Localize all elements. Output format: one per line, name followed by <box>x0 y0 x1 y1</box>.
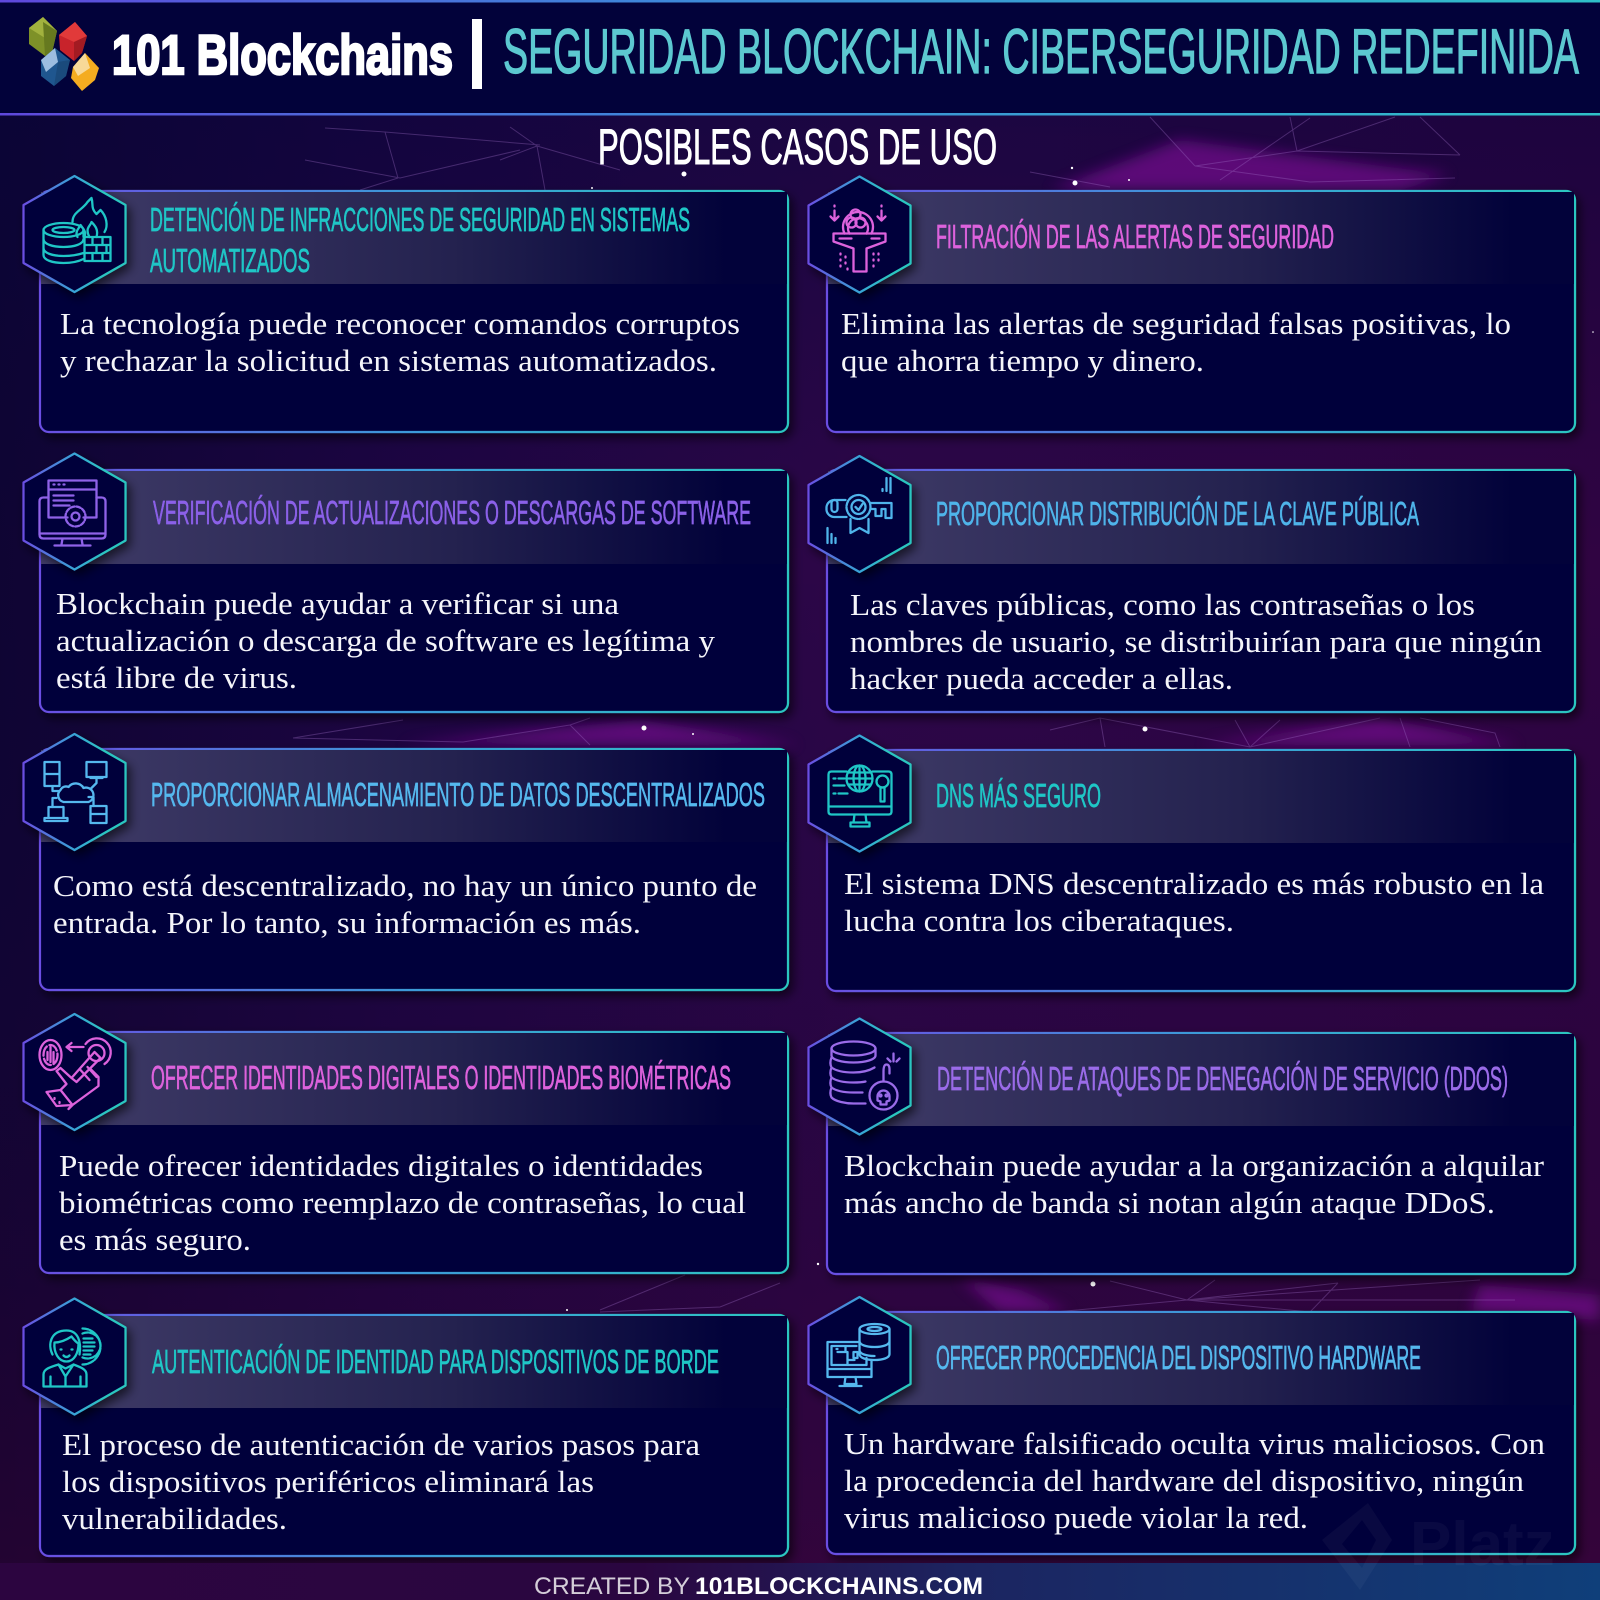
icon: funnel filter <box>808 176 910 292</box>
body text: está libre de virus. <box>56 660 297 695</box>
divider <box>472 19 482 89</box>
footer band <box>0 1563 1600 1600</box>
body text <box>841 306 1511 378</box>
icon: fingerprint and hand <box>24 1014 126 1130</box>
body text: nombres de usuario, se distribuirían para que ningún <box>850 624 1543 659</box>
logo wordmark: 101 Blockchains <box>112 23 453 86</box>
heading: DETENCIÓN DE INFRACCIONES DE SEGURIDAD EN SISTEMAS <box>150 201 690 238</box>
heading: AUTENTICACIÓN DE IDENTIDAD PARA DISPOSITIVOS DE BORDE <box>152 1343 719 1380</box>
body text: virus malicioso puede violar la red. <box>844 1500 1308 1535</box>
panel: verificación de actualizaciones <box>24 454 788 712</box>
icon: database stack with bomb <box>808 1018 910 1134</box>
body text: Blockchain puede ayudar a verificar si una <box>56 586 619 621</box>
panel: autenticación de identidad <box>24 1298 788 1556</box>
panel: DNS más seguro <box>808 736 1575 991</box>
logo: four cubes <box>29 17 99 91</box>
heading <box>150 201 690 279</box>
body text: Como está descentralizado, no hay un único punto de <box>53 868 757 903</box>
body text <box>60 306 740 378</box>
section heading: POSIBLES CASOS DE USO <box>598 119 997 175</box>
icon: hardware monitor and database <box>808 1297 910 1413</box>
body text <box>844 1148 1545 1220</box>
body text <box>844 1426 1546 1535</box>
body text <box>844 866 1544 938</box>
credit line: 101BLOCKCHAINS.COM <box>695 1573 983 1600</box>
body text: los dispositivos periféricos eliminará las <box>62 1464 594 1499</box>
body text: vulnerabilidades. <box>62 1501 287 1536</box>
body text <box>59 1148 746 1257</box>
icon: DNS monitor and globe <box>808 736 910 852</box>
icon: person with gear <box>24 1298 126 1414</box>
icon: key with badge <box>808 456 910 572</box>
watermark <box>1322 1503 1555 1590</box>
panel: detención de infracciones <box>24 176 788 432</box>
panel: almacenamiento descentralizado <box>24 734 788 990</box>
heading: DNS MÁS SEGURO <box>936 777 1101 814</box>
panel: ataques DDoS <box>808 1018 1575 1274</box>
heading: AUTOMATIZADOS <box>150 242 310 279</box>
panel: procedencia hardware <box>808 1297 1575 1554</box>
body text: hacker pueda acceder a ellas. <box>850 661 1233 696</box>
body text: la procedencia del hardware del dispositivo, ningún <box>844 1463 1525 1498</box>
body text: actualización o descarga de software es legítima y <box>56 623 716 658</box>
heading: VERIFICACIÓN DE ACTUALIZACIONES O DESCARGAS DE SOFTWARE <box>153 494 751 531</box>
body text: entrada. Por lo tanto, su información es más. <box>53 905 641 940</box>
body text: biométricas como reemplazo de contraseñas, lo cual <box>59 1185 746 1220</box>
body text: que ahorra tiempo y dinero. <box>841 343 1204 378</box>
body text: Un hardware falsificado oculta virus maliciosos. Con <box>844 1426 1546 1461</box>
credit line <box>534 1573 983 1600</box>
body text <box>850 587 1543 696</box>
body text: El proceso de autenticación de varios pasos para <box>62 1427 700 1462</box>
icon: cloud network <box>24 734 126 850</box>
credit line: CREATED BY <box>534 1573 690 1600</box>
body text: y rechazar la solicitud en sistemas automatizados. <box>60 343 717 378</box>
body text: Puede ofrecer identidades digitales o identidades <box>59 1148 703 1183</box>
header bar <box>0 0 1600 116</box>
body text: El sistema DNS descentralizado es más robusto en la <box>844 866 1544 901</box>
body text: más ancho de banda si notan algún ataque DDoS. <box>844 1185 1495 1220</box>
panel: filtración de alertas <box>808 176 1575 432</box>
body text: es más seguro. <box>59 1222 251 1257</box>
panel: clave pública <box>808 456 1575 712</box>
body text: lucha contra los ciberataques. <box>844 903 1234 938</box>
body text <box>56 586 716 695</box>
body text: La tecnología puede reconocer comandos corruptos <box>60 306 740 341</box>
icon: database with firewall <box>24 176 126 292</box>
panel: identidades digitales <box>24 1014 788 1273</box>
body text: Las claves públicas, como las contraseñas o los <box>850 587 1475 622</box>
heading: PROPORCIONAR ALMACENAMIENTO DE DATOS DESCENTRALIZADOS <box>151 776 765 813</box>
body text: Elimina las alertas de seguridad falsas positivas, lo <box>841 306 1511 341</box>
body text <box>53 868 757 940</box>
heading: OFRECER IDENTIDADES DIGITALES O IDENTIDADES BIOMÉTRICAS <box>151 1059 731 1096</box>
icon: monitor with gear <box>24 454 126 570</box>
body text <box>62 1427 700 1536</box>
body text: Blockchain puede ayudar a la organización a alquilar <box>844 1148 1545 1183</box>
watermark: Platz <box>1410 1510 1555 1579</box>
